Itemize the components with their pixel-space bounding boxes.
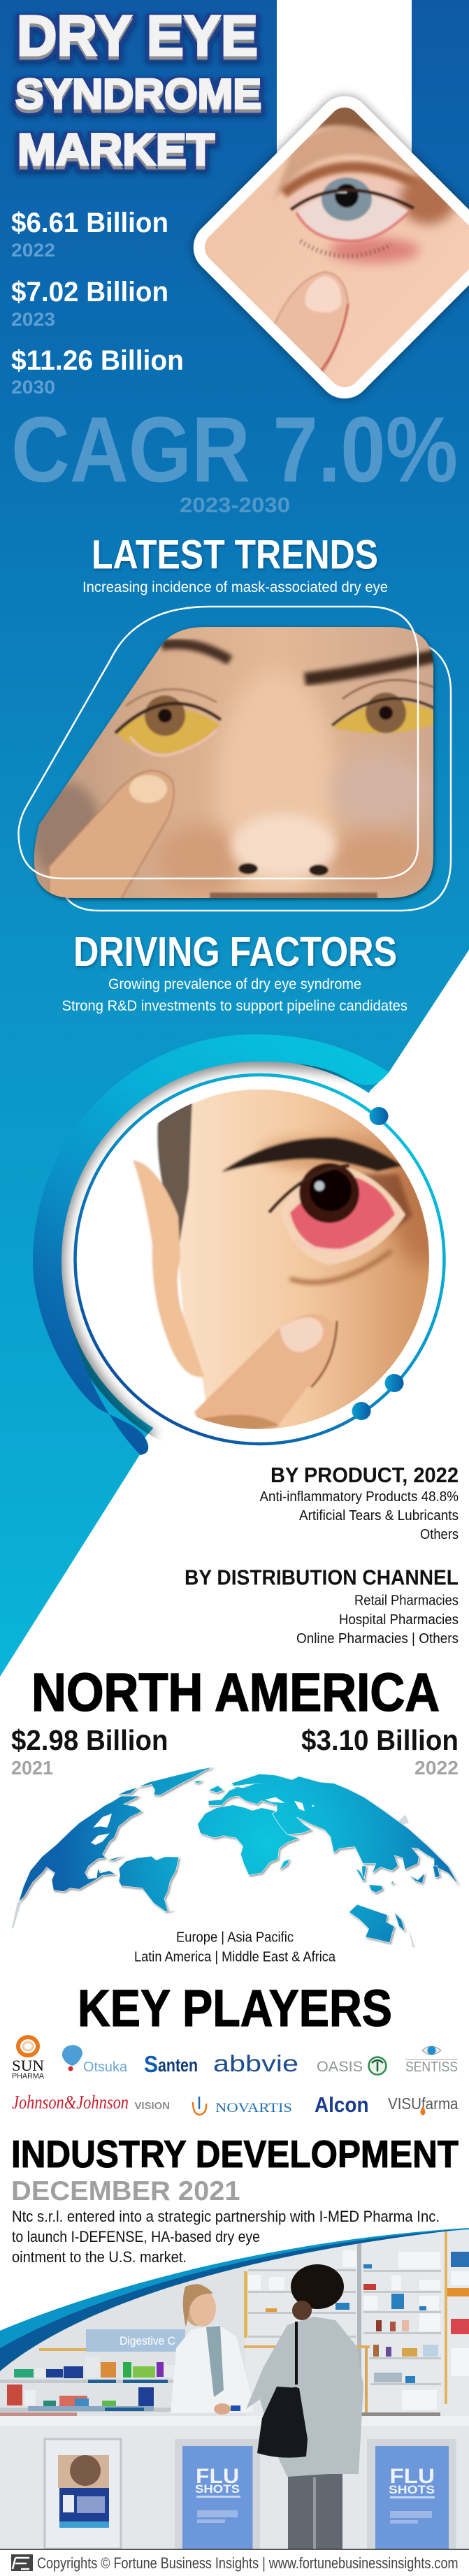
regional value 2022: $3.10 Billion <box>301 1724 459 1756</box>
curved band: dark <box>0 2229 469 2371</box>
driving factors text: Growing prevalence of dry eye syndrome <box>108 976 361 992</box>
driving factors text <box>62 976 407 1014</box>
flu shots poster right: SHOTS <box>389 2483 435 2496</box>
pharmacy photo: Digestive C <box>120 2334 175 2347</box>
market value stats: 2022 <box>11 240 55 261</box>
flyer poster <box>45 2439 121 2549</box>
curved accent band <box>33 1034 389 1455</box>
by product segment <box>260 1463 459 1542</box>
flu shots poster left: SHOTS <box>195 2482 240 2496</box>
market value stats: 2030 <box>11 377 55 398</box>
outer decorative outline behind photo <box>64 642 451 911</box>
market value stats: 2023 <box>11 309 55 330</box>
logo: Alcon: Alcon <box>315 2092 369 2117</box>
development text <box>12 2208 440 2266</box>
development date: DECEMBER 2021 <box>11 2176 240 2206</box>
regional value 2021: $2.98 Billion <box>11 1724 168 1756</box>
logo: VISUfarma: VISUfarma <box>388 2094 459 2113</box>
logo: Sentiss: SENTISS <box>405 2060 458 2075</box>
white area above curve <box>0 2215 469 2331</box>
band shadow <box>56 1059 389 1440</box>
by product segment: BY PRODUCT, 2022 <box>270 1463 459 1487</box>
heading: latest trends: LATEST TRENDS <box>92 533 378 577</box>
regional value 2022: 2022 <box>414 1757 459 1779</box>
logo: Sun Pharma: SUN <box>12 2057 44 2074</box>
latest trends text: Increasing incidence of mask-associated dry eye <box>82 579 388 595</box>
development text: to launch I-DEFENSE, HA-based dry eye <box>12 2228 260 2245</box>
white circle backing <box>60 1060 459 1459</box>
region list: Europe | Asia Pacific <box>176 1930 294 1946</box>
diamond photo: eye with finger <box>182 85 469 410</box>
logo: Sun Pharma <box>12 2037 45 2081</box>
footer logo <box>11 2554 33 2571</box>
logo: Otsuka: Otsuka <box>83 2060 128 2075</box>
market value stats: $11.26 Billion <box>11 345 184 376</box>
customer <box>246 2264 363 2549</box>
driving factors text: Strong R&D investments to support pipeline candidates <box>62 998 407 1014</box>
logo: Santen: S <box>144 2051 158 2077</box>
flu shots poster left <box>175 2439 260 2549</box>
logo: Novartis: NOVARTIS <box>215 2101 292 2115</box>
title: MARKET <box>17 124 215 175</box>
title <box>15 4 261 175</box>
by product segment: Anti-inflammatory Products 48.8% <box>260 1489 459 1505</box>
by distribution channel segment: Retail Pharmacies <box>354 1593 459 1609</box>
curved band: light <box>0 2228 469 2348</box>
market value stats: $7.02 Billion <box>11 277 168 307</box>
logo: Oasis: OASIS <box>317 2059 363 2075</box>
logo: Otsuka <box>62 2045 128 2075</box>
by distribution channel segment: Online Pharmacies | Others <box>296 1631 459 1647</box>
by distribution channel segment: Hospital Pharmacies <box>339 1612 459 1628</box>
logo: Johnson & Johnson Vision: VISION <box>134 2100 170 2112</box>
blue gradient background panel <box>0 0 469 1677</box>
development text: Ntc s.r.l. entered into a strategic partnership with I-MED Pharma Inc. <box>12 2208 440 2225</box>
photo: yellow eyes with finger <box>28 622 440 909</box>
regional value 2022 <box>301 1724 459 1779</box>
heading: key players: KEY PLAYERS <box>78 1979 392 2037</box>
logo: Johnson & Johnson Vision: Johnson&Johnson <box>12 2092 129 2113</box>
logo: Oasis <box>317 2057 386 2075</box>
world map <box>12 1767 459 1948</box>
region list <box>134 1930 336 1965</box>
pharmacist <box>171 2284 253 2415</box>
title: DRY EYE <box>17 4 258 68</box>
region list: Latin America | Middle East & Africa <box>134 1950 336 1965</box>
logo: Novartis <box>193 2097 292 2115</box>
logo: Sun Pharma: PHARMA <box>12 2072 45 2081</box>
logo: AbbVie: abbvie <box>213 2050 298 2076</box>
pharmacy photo <box>0 2222 469 2549</box>
logo: Santen <box>144 2051 198 2077</box>
by product segment: Others <box>420 1527 459 1542</box>
market value stats: $6.61 Billion <box>11 208 168 238</box>
flu shots poster left: FLU <box>196 2465 239 2488</box>
ring with dots <box>75 1075 445 1444</box>
photo: red eye in circle <box>132 1090 429 1429</box>
regional value 2021 <box>11 1724 168 1779</box>
development text: ointment to the U.S. market. <box>12 2248 187 2266</box>
flu shots poster right: FLU <box>390 2465 435 2488</box>
by product segment: Artificial Tears & Lubricants <box>299 1508 459 1524</box>
title: SYNDROME <box>15 71 261 117</box>
flu shots poster right <box>367 2439 456 2549</box>
white vertical stripe <box>277 0 412 210</box>
logo: Santen: anten <box>158 2055 198 2076</box>
by distribution channel segment <box>185 1565 459 1647</box>
market value stats <box>11 208 184 398</box>
CAGR period: 2023-2030 <box>180 493 290 517</box>
white outline frame <box>18 607 418 878</box>
logo: Sentiss <box>405 2046 458 2075</box>
regional value 2021: 2021 <box>11 1757 53 1779</box>
heading: driving factors: DRIVING FACTORS <box>73 929 397 975</box>
